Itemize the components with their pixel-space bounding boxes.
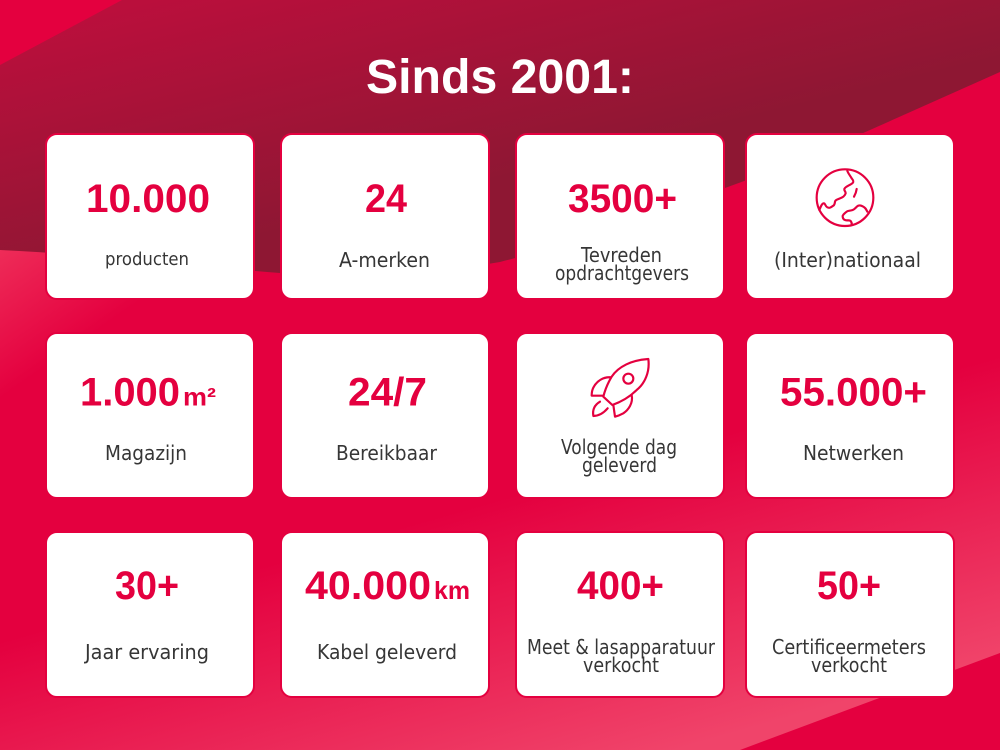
card: 55.000+ Netwerken: Netwerken <box>803 441 904 465</box>
card: 30+ Jaar ervaring <box>46 532 254 697</box>
card: 55.000+ Netwerken: 55.000+ <box>780 370 927 414</box>
card: 24 A-merken <box>281 134 489 299</box>
card: 3500+ opdrachtgevers: opdrachtgevers <box>555 261 689 285</box>
card: 10.000 producten <box>46 134 254 299</box>
card: 10.000 producten: producten <box>105 249 189 270</box>
card: 1.000 m2 Magazijn: m² <box>183 384 216 412</box>
card: 40.000 km Kabel geleverd <box>281 532 489 697</box>
card: 1.000 m2 Magazijn: Magazijn <box>105 441 187 465</box>
card: 3500+ opdrachtgevers <box>516 134 724 299</box>
card: 24/7 Bereikbaar: 24/7 <box>348 370 427 414</box>
card: 400+ Meet en lasapparatuur <box>516 532 724 697</box>
card: 40.000 km Kabel geleverd: 40.000 <box>305 564 431 608</box>
card: Volgende dag geleverd: geleverd <box>582 453 657 477</box>
icon: globe <box>817 169 873 226</box>
card: 1.000 m2 Magazijn: 1.000 <box>80 370 180 414</box>
card: 40.000 km Kabel geleverd: km <box>434 577 470 605</box>
card: 40.000 km Kabel geleverd: Kabel geleverd <box>317 640 457 664</box>
card: 55.000+ Netwerken <box>746 333 954 498</box>
card: 10.000 producten: 10.000 <box>86 177 210 221</box>
card: 400+ Meet en lasapparatuur: Meet & lasapparatuur <box>527 635 716 659</box>
card: 50+ Certificeermeters: verkocht <box>811 653 887 677</box>
card: 50+ Certificeermeters <box>746 532 954 697</box>
card: 24 A-merken: 24 <box>365 177 408 221</box>
title: Sinds 2001: <box>366 51 634 104</box>
card: 50+ Certificeermeters: 50+ <box>817 564 881 608</box>
card: (Inter)nationaal: (Inter)nationaal <box>774 248 921 272</box>
card: 400+ Meet en lasapparatuur: 400+ <box>577 564 664 608</box>
card: 24/7 Bereikbaar <box>281 333 489 498</box>
card: 30+ Jaar ervaring: Jaar ervaring <box>83 640 209 664</box>
card: 24 A-merken: A-merken <box>339 248 430 272</box>
card: Volgende dag geleverd <box>516 333 724 498</box>
card: 400+ Meet en lasapparatuur: verkocht <box>583 653 659 677</box>
card: 24/7 Bereikbaar: Bereikbaar <box>336 441 438 465</box>
card: 30+ Jaar ervaring: 30+ <box>115 564 179 608</box>
card: (Inter)nationaal <box>746 134 954 299</box>
card: Volgende dag geleverd: Volgende dag <box>561 435 677 459</box>
icon: rocket <box>592 359 649 417</box>
card: 3500+ opdrachtgevers: Tevreden <box>580 243 662 267</box>
card: 3500+ opdrachtgevers: 3500+ <box>568 177 677 221</box>
card: 50+ Certificeermeters: Certificeermeters <box>772 635 926 659</box>
card: 1.000 m2 Magazijn <box>46 333 254 498</box>
